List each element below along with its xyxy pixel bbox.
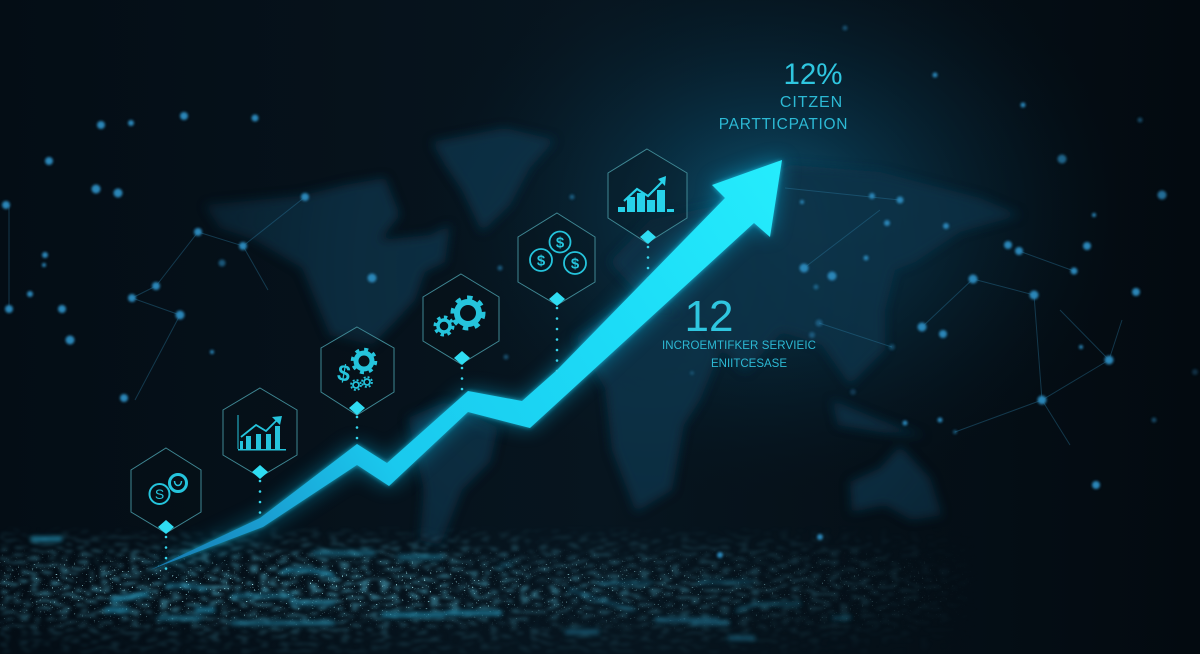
icon: dollar signs — [537, 234, 580, 272]
icon: gears — [435, 298, 484, 335]
step 5: three coins hexagon — [518, 213, 595, 306]
icon: dollar signs: $ — [571, 256, 580, 272]
icon: large gear — [351, 350, 376, 390]
stat: 12: 12 — [685, 292, 733, 341]
node diamond — [549, 292, 565, 306]
hexagon outline — [423, 274, 499, 364]
blurred particle bands — [0, 529, 918, 654]
world map silhouette — [205, 128, 1020, 545]
arrow glow — [150, 160, 782, 570]
map: Greenland — [432, 128, 555, 232]
hexagon outline — [223, 388, 297, 477]
map: North America — [205, 178, 450, 345]
hexagon outline — [131, 448, 201, 533]
map: South America — [408, 402, 498, 545]
label: service line two: ENIITCESASE — [711, 358, 787, 370]
sparkling particles — [0, 548, 1000, 632]
hexagon outline — [518, 213, 595, 305]
hexagon outline — [321, 327, 394, 415]
network lines — [9, 188, 1122, 445]
arrow body — [150, 160, 782, 570]
icon: coins — [530, 232, 586, 274]
hexagon outline — [608, 149, 687, 243]
callout: service increase — [662, 292, 816, 370]
growth arrow — [150, 160, 782, 570]
dotted connectors — [166, 247, 648, 570]
icon: trend bars — [618, 176, 674, 212]
map: Indonesia — [832, 401, 914, 438]
node diamond — [454, 351, 470, 365]
icon: bar chart — [238, 415, 286, 450]
label: citizen: CITZEN — [780, 94, 843, 111]
icon: dollar signs: $ — [537, 252, 546, 270]
node diamond — [252, 465, 268, 479]
node diamond — [640, 230, 656, 244]
step 4: gears hexagon — [423, 274, 499, 365]
label: participation: PARTTICPATION — [719, 116, 848, 133]
arrow tight glow — [150, 160, 782, 570]
stat: 12%: 12% — [783, 58, 843, 91]
map: Eurasia — [610, 165, 1020, 385]
icon: dollar signs: $ — [556, 234, 565, 252]
map: Australia — [850, 446, 942, 520]
icon: coins: S — [155, 486, 164, 502]
node diamond — [349, 401, 365, 415]
step 3: dollar and gears hexagon — [321, 327, 394, 415]
map: Africa — [575, 302, 720, 512]
particle field — [0, 525, 1000, 654]
particle streaks — [33, 539, 850, 638]
node diamond — [158, 520, 174, 534]
icon: dollar sign: $ — [335, 359, 353, 387]
step 6: trend chart hexagon — [608, 149, 687, 244]
label: service line one: INCROEMTIFKER SERVIEIC — [662, 340, 816, 352]
step 2: chart hexagon — [223, 388, 297, 479]
callout: citizen participation — [719, 58, 848, 133]
step 1: coins hexagon — [131, 448, 201, 534]
